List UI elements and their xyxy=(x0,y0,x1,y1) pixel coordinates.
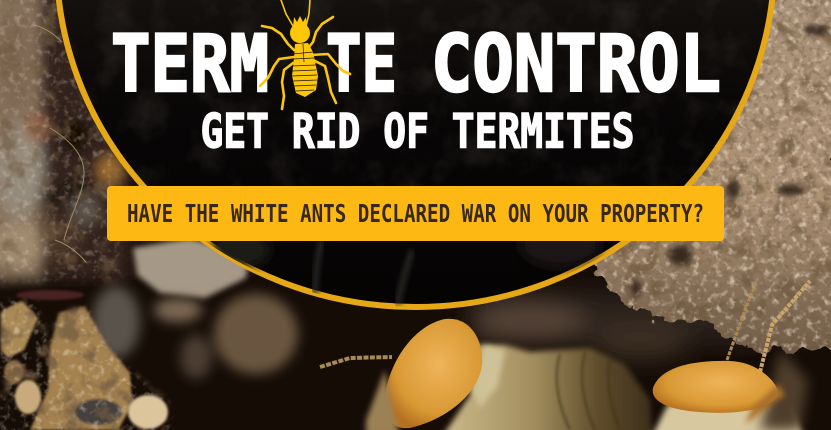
title: TE xyxy=(326,20,397,110)
left soil masses xyxy=(0,0,130,280)
title: TERM xyxy=(111,20,269,110)
rock wall on the right xyxy=(593,0,831,354)
title xyxy=(111,20,721,110)
callout banner xyxy=(107,186,724,241)
subtitle: GET RID OF TERMITES xyxy=(200,104,634,160)
blurred stones xyxy=(92,286,298,379)
termite two xyxy=(650,281,810,430)
pebble xyxy=(133,238,250,298)
title: CONTROL xyxy=(431,20,721,110)
crumbly tan lumps bottom left xyxy=(0,295,175,430)
icon: termite xyxy=(260,0,350,109)
dark circle panel with yellow ring xyxy=(50,0,780,307)
hair strands xyxy=(35,25,86,262)
winged insect fragment xyxy=(16,290,84,300)
pale pebbles xyxy=(15,380,168,429)
termite one xyxy=(320,319,652,430)
left soil texture xyxy=(0,0,124,286)
lower middle haze xyxy=(470,292,770,360)
